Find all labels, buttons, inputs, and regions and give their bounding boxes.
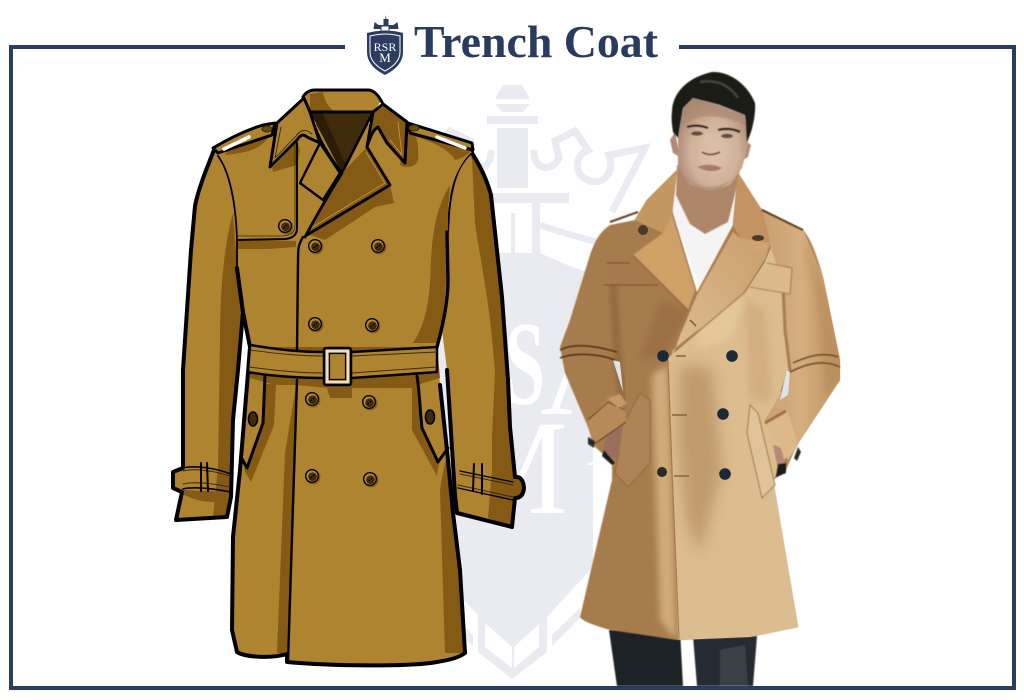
pockets (241, 376, 448, 468)
left lapel (300, 143, 340, 200)
coat silhouette (560, 170, 840, 640)
trousers (609, 630, 757, 686)
watermark letters (456, 290, 641, 543)
left sleeve (173, 150, 243, 520)
watermark letters: M (456, 394, 568, 543)
center front (288, 237, 303, 662)
watermark: RSM crest (436, 85, 645, 679)
logo: RSM crest: M (379, 50, 391, 65)
photo: man in beige trench coat (560, 72, 842, 686)
shirt (672, 186, 738, 292)
shoulder epaulets photo (610, 210, 803, 230)
chest shadow (644, 303, 686, 357)
coat panels and shading (612, 210, 842, 642)
neck (676, 165, 740, 234)
epaulets (213, 123, 473, 153)
left lapel (633, 170, 695, 310)
right lapel (668, 173, 770, 370)
hair (672, 72, 755, 142)
coat buttons (638, 225, 764, 480)
buttons (248, 219, 434, 487)
sleeve gaps (613, 360, 790, 400)
storm flaps (604, 262, 792, 294)
storm flap (237, 143, 297, 240)
right sleeve (762, 210, 840, 452)
right panel fold shadows (678, 365, 722, 555)
centre edge (668, 360, 679, 640)
pockets (615, 393, 775, 498)
watermark letters: S (505, 298, 545, 431)
logo letters: RSR (374, 40, 396, 54)
logo: RSM crest (367, 15, 403, 75)
belt buckle (324, 348, 351, 385)
collar (270, 98, 407, 167)
right lapel (305, 147, 390, 237)
face (678, 98, 748, 191)
right front panel (668, 245, 798, 642)
belt (248, 345, 437, 385)
cuffs (560, 346, 840, 461)
ears (670, 132, 751, 160)
title: Trench Coat (414, 17, 658, 67)
hands (602, 424, 786, 477)
left sleeve shading (612, 270, 622, 432)
right sleeve (442, 150, 524, 527)
body shadows (413, 185, 450, 343)
watermark letters: A (540, 290, 641, 445)
coat body (217, 124, 472, 665)
centre highlight (652, 365, 676, 640)
neck opening (303, 90, 383, 173)
hair highlight (700, 81, 738, 98)
watermark letters: I (585, 399, 610, 482)
illustration: trench coat (173, 90, 524, 665)
